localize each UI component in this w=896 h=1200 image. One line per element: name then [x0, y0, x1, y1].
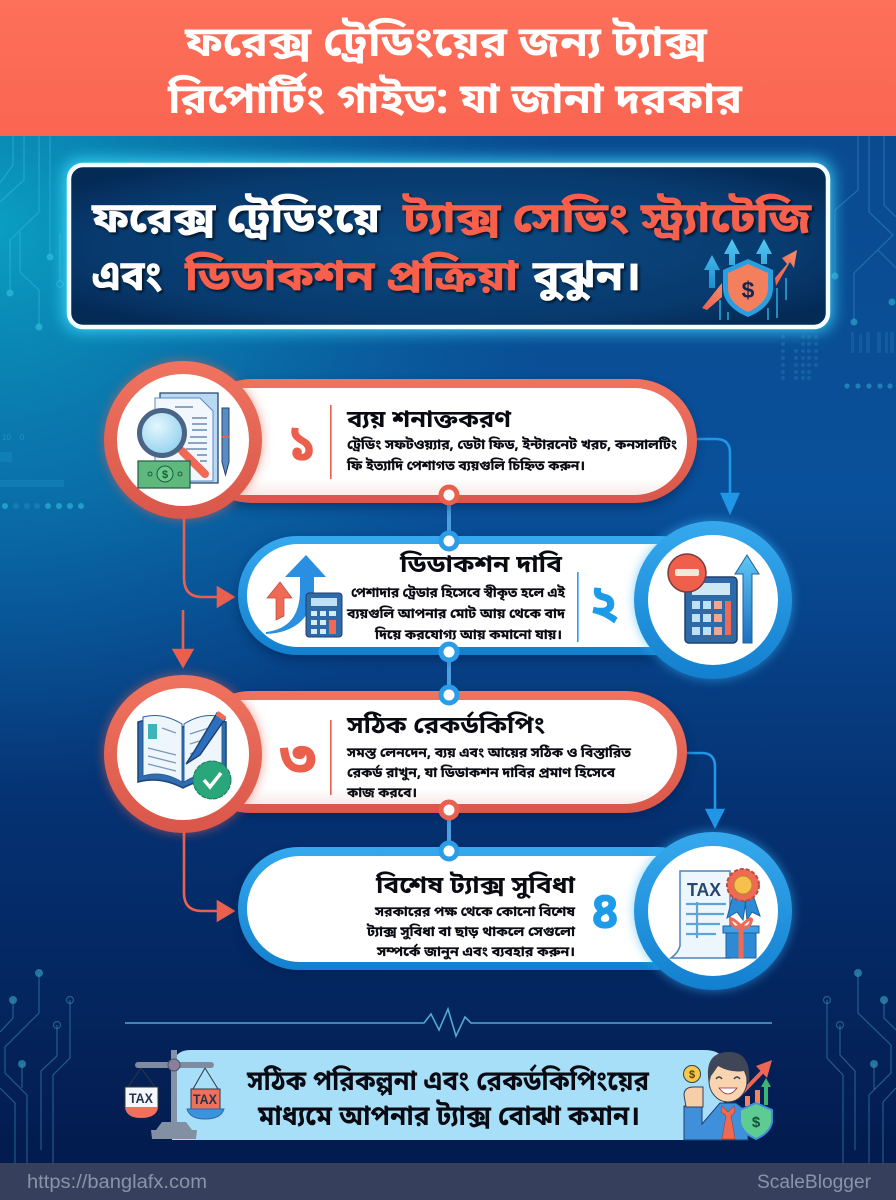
key message text [91, 193, 812, 308]
arrow: step 1 to 2 (blue) [697, 439, 738, 512]
connector node [441, 843, 457, 859]
panel: step 2 [238, 520, 793, 680]
key message text: বুঝুন। [532, 252, 641, 308]
icon: happy investor [684, 1052, 772, 1140]
callout: bottom banner [172, 1050, 724, 1140]
step number 1: ১ [288, 415, 316, 481]
divider [577, 572, 579, 642]
key message text: ডিডাকশন প্রক্রিয়া [184, 251, 519, 308]
step 2 body: ব্যয়গুলি আপনার মোট আয় থেকে বাদ [346, 605, 565, 624]
data dots: left middle [0, 433, 84, 509]
badge ring [103, 674, 263, 834]
key message text: এবং [92, 252, 162, 308]
header title: রিপোর্টিং গাইড: যা জানা দরকার [167, 71, 743, 131]
arrow: red from step 2 to 3 [174, 610, 192, 666]
step 3 body: কাজ করবে। [346, 785, 417, 803]
icon: calculator with minus and arrow [668, 554, 759, 643]
circuit pattern: right top [832, 136, 896, 326]
bottom connector node [441, 802, 457, 818]
top connector node [441, 533, 457, 549]
step 2 body: পেশাদার ট্রেডার হিসেবে স্বীকৃত হলে এই [351, 584, 566, 603]
key message text: ফরেক্স ট্রেডিংয়ে [91, 193, 381, 250]
footer bar [0, 1163, 896, 1200]
icon: growth arrows and calculator [266, 555, 342, 637]
step 1 body [346, 436, 677, 476]
icon: happy investor: $ [752, 1114, 761, 1131]
step 4 body: সম্পর্কে জানুন এবং ব্যবহার করুন। [376, 942, 575, 962]
divider [330, 720, 332, 795]
step 1 heading: ব্যয় শনাক্তকরণ [346, 405, 511, 437]
divider: pulse line [125, 1009, 772, 1036]
step 4 heading: বিশেষ ট্যাক্স সুবিধা [375, 871, 576, 903]
footer brand: ScaleBlogger [757, 1172, 872, 1193]
arrow: red from step 1 to 2 [184, 518, 233, 606]
data dots: right middle [781, 332, 894, 389]
icon: tax scale [125, 1050, 224, 1139]
step 2 heading: ডিডাকশন দাবি [399, 550, 563, 582]
divider [330, 405, 332, 479]
step 3 heading: সঠিক রেকর্ডকিপিং [346, 711, 545, 743]
footer link: https://banglafx.com [27, 1172, 207, 1193]
circuit pattern: left top [0, 136, 63, 330]
panel: key message [64, 160, 832, 331]
step 2 body [346, 584, 566, 645]
step number 4: ৪ [590, 881, 620, 950]
panel: step 4 [238, 831, 793, 991]
top connector node [441, 687, 457, 703]
step 3 body [346, 744, 632, 803]
connector node [441, 487, 457, 503]
step 1 body: ফি ইত্যাদি পেশাগত ব্যয়গুলি চিহ্নিত করুন। [346, 457, 585, 476]
step 4 body [366, 903, 576, 962]
callout text: সঠিক পরিকল্পনা এবং রেকর্ডকিপিংয়ের [246, 1063, 650, 1102]
separator connectors [447, 496, 451, 848]
data dots: left middle: 10 0 [2, 433, 25, 442]
step 3 body: রেকর্ড রাখুন, যা ডিডাকশন দাবির প্রমাণ হিসেবে [347, 763, 616, 783]
arrow: step 3 to 4 (blue) [687, 753, 723, 826]
step number 3: ৩ [280, 728, 316, 797]
step 4 body: ট্যাক্স সুবিধা বা ছাড় থাকলে সেগুলো [366, 923, 575, 942]
badge ring [103, 360, 263, 520]
icon: shield with arrows: $ [742, 277, 755, 303]
step 4 body: সরকারের পক্ষ থেকে কোনো বিশেষ [374, 903, 576, 922]
icon: shield with arrows [702, 239, 797, 320]
icon: tax form with ribbon and gift: TAX [687, 880, 721, 900]
icon: magnifier on documents and cash: $ [162, 469, 168, 481]
icon: happy investor: $ [689, 1069, 695, 1081]
key message text: ট্যাক্স সেভিং স্ট্র্যাটেজি [402, 193, 812, 250]
header title: ফরেক্স ট্রেডিংয়ের জন্য ট্যাক্স [184, 17, 708, 74]
bottom connector node [441, 644, 457, 660]
icon: tax scale: TAX [129, 1090, 154, 1106]
step 1 body: ট্রেডিং সফটওয়্যার, ডেটা ফিড, ইন্টারনেট খরচ, কনসালটিং [347, 436, 677, 455]
icon: open book with pen and check badge [138, 713, 231, 799]
step number 2: ২ [590, 575, 618, 641]
step 3 body: সমস্ত লেনদেন, ব্যয় এবং আয়ের সঠিক ও বিস্তারিত [346, 744, 632, 763]
step 2 body: দিয়ে করযোগ্য আয় কমানো যায়। [374, 626, 562, 645]
badge ring [633, 520, 793, 680]
header title [167, 17, 743, 131]
circuit pattern: bottom right [824, 969, 896, 1163]
header banner [0, 0, 896, 136]
icon: tax form with ribbon and gift [671, 869, 760, 958]
arrow: red from step 3 to 4 [184, 832, 233, 920]
panel: step 1 [103, 360, 697, 520]
callout text [246, 1063, 650, 1137]
badge ring [633, 831, 793, 991]
callout text: মাধ্যমে আপনার ট্যাক্স বোঝা কমান। [257, 1099, 640, 1137]
circuit pattern: bottom left [0, 969, 74, 1163]
icon: tax scale: TAX [193, 1091, 218, 1107]
panel: step 3 [103, 674, 688, 834]
icon: magnifier on documents and cash [138, 393, 229, 488]
